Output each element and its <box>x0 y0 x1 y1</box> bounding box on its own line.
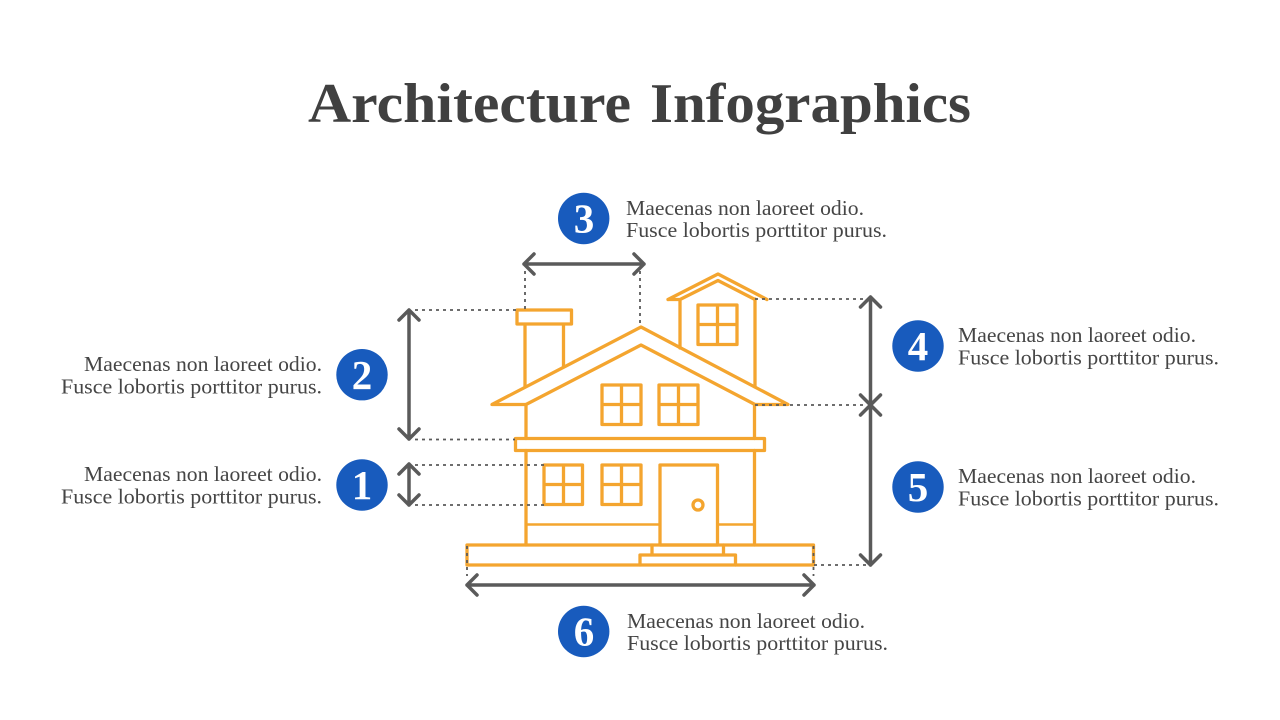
wall ledge <box>526 523 754 526</box>
badge 1: 1 <box>352 462 372 508</box>
chimney <box>517 310 572 387</box>
item 2 <box>61 349 388 400</box>
badge 1 <box>336 459 388 511</box>
text 6: Maecenas non laoreet odio. <box>627 609 865 633</box>
text 3 <box>626 196 887 242</box>
title: Architecture <box>308 73 631 135</box>
text 1: Fusce lobortis porttitor purus. <box>61 484 322 508</box>
text 3: Maecenas non laoreet odio. <box>626 196 864 220</box>
upper walls <box>526 404 754 438</box>
text 1: Maecenas non laoreet odio. <box>84 462 322 486</box>
text 4 <box>958 323 1219 370</box>
arrow: height of upper storey <box>860 297 880 405</box>
arrow: width of roof <box>524 254 644 274</box>
text 5 <box>958 464 1219 510</box>
badge 2: 2 <box>352 352 372 398</box>
item 4 <box>892 320 1219 372</box>
text 4: Fusce lobortis porttitor purus. <box>958 346 1219 370</box>
badge 6: 6 <box>574 608 594 654</box>
title: Infographics <box>650 73 971 135</box>
item 6 <box>558 606 888 657</box>
foundation <box>467 545 814 565</box>
arrow: width of base <box>467 575 814 595</box>
arrow: height of roof <box>399 310 419 439</box>
text 1 <box>61 462 322 508</box>
badge 4 <box>892 320 944 372</box>
text 6: Fusce lobortis porttitor purus. <box>627 631 888 655</box>
text 5: Fusce lobortis porttitor purus. <box>958 486 1219 510</box>
door <box>660 465 718 545</box>
badge 6 <box>558 606 609 657</box>
badge 4: 4 <box>908 323 928 369</box>
text 6 <box>627 609 888 655</box>
badge 5 <box>892 461 944 513</box>
badge 2 <box>336 349 388 400</box>
text 4: Maecenas non laoreet odio. <box>958 323 1196 347</box>
entry steps <box>640 545 736 565</box>
badge 5: 5 <box>908 464 928 510</box>
text 3: Fusce lobortis porttitor purus. <box>626 218 887 242</box>
dormer <box>668 274 767 387</box>
text 2: Maecenas non laoreet odio. <box>84 352 322 376</box>
door knob <box>693 500 703 510</box>
item 1 <box>61 459 388 511</box>
upper windows <box>602 385 698 424</box>
arrow: height of window <box>399 464 419 505</box>
title <box>308 73 971 135</box>
text 2: Fusce lobortis porttitor purus. <box>61 374 322 398</box>
floor band <box>516 438 764 450</box>
dormer window <box>698 305 737 344</box>
arrow: height of lower storey <box>860 405 880 565</box>
house illustration <box>467 274 814 565</box>
item 3 <box>558 193 887 244</box>
text 5: Maecenas non laoreet odio. <box>958 464 1196 488</box>
dotted guide lines <box>415 271 866 576</box>
lower walls <box>526 450 754 545</box>
badge 3: 3 <box>574 196 594 242</box>
item 5 <box>892 461 1219 513</box>
text 2 <box>61 352 322 398</box>
lower windows <box>544 465 641 504</box>
badge 3 <box>558 193 609 244</box>
main roof <box>492 327 788 404</box>
